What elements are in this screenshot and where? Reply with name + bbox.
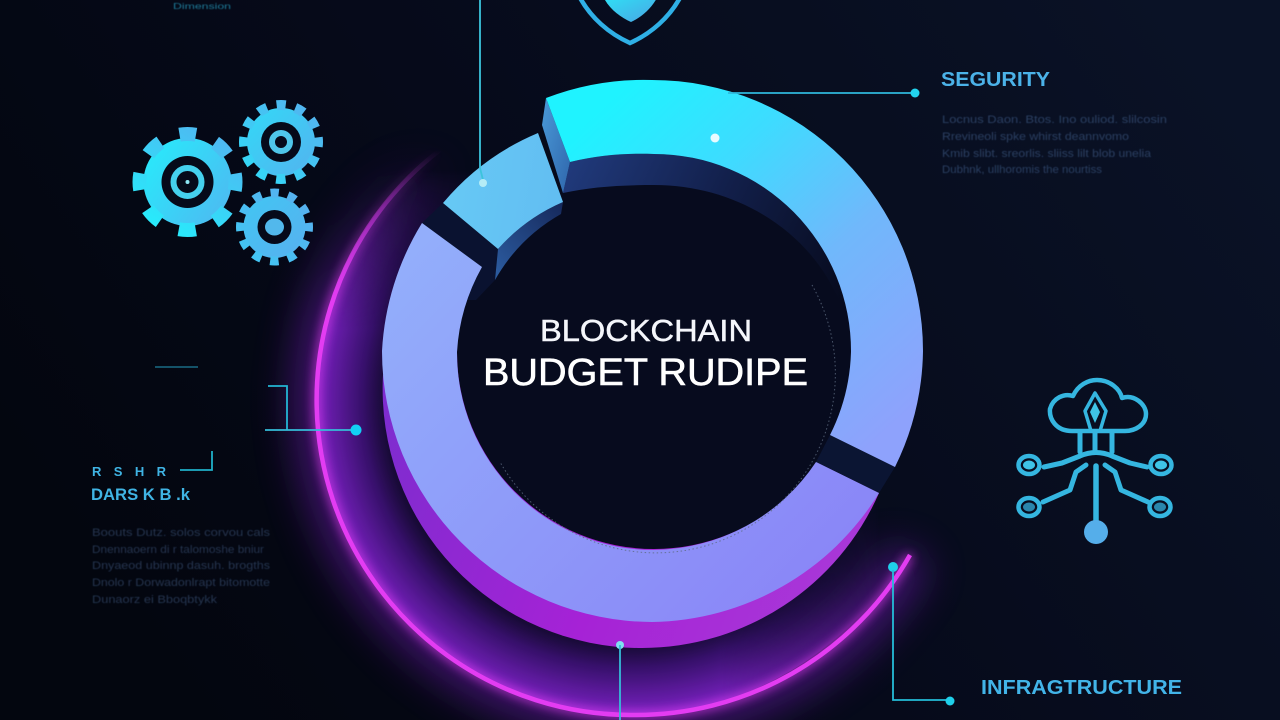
- inner wall of large segment: [563, 154, 851, 352]
- connector: bottom: [616, 641, 624, 720]
- title line 2: BUDGET RUDIPE: [483, 352, 808, 394]
- heading: infrastructure: INFRAGTRUCTURE: [981, 677, 1182, 699]
- text block: left: Dunaorz ei Bboqbtykk: [92, 594, 218, 606]
- text block: left: Dnennaoern di r talomoshe bniur: [92, 544, 264, 556]
- icon: gears: [140, 105, 318, 261]
- circuit nodes: [1018, 456, 1172, 516]
- large gear: [140, 134, 236, 230]
- title line 1: BLOCKCHAIN: [540, 313, 752, 348]
- lower gear: [240, 193, 308, 261]
- gem core: [1090, 402, 1100, 423]
- connector: security: [728, 88, 920, 98]
- title: [483, 313, 808, 394]
- end face of large segment: [542, 98, 570, 193]
- text block: left: Boouts Dutz. solos corvou cals: [92, 527, 271, 539]
- gap between segments, lower right: [816, 435, 895, 493]
- donut extrusion: purple base: [383, 300, 879, 648]
- donut chart: [382, 80, 923, 648]
- dotted inner arc: [500, 285, 835, 553]
- segment: small light blue: [443, 133, 563, 249]
- text block: security: Kmib slibt. sreorlis. sliiss lilt blob unelia: [942, 148, 1152, 160]
- neon ring with purple glow: [315, 85, 945, 715]
- segment: large lavender: [382, 223, 879, 622]
- connector: infrastructure: [888, 562, 954, 706]
- upper gear: [244, 105, 318, 179]
- heading: left block: R S H R: [92, 464, 167, 479]
- heading: security: SEGURITY: [941, 69, 1051, 91]
- text block: security: Locnus Daon. Btos. Ino ouliod. slilcosin: [942, 114, 1167, 126]
- text block: security: Rrevineoli spke whirst deannvomo: [942, 131, 1129, 143]
- heading: left block: [91, 464, 191, 504]
- text block: left: [92, 527, 271, 606]
- icon: shield: [578, 0, 682, 43]
- root node: [1084, 520, 1108, 544]
- gap between segments, upper left: [422, 203, 498, 300]
- text block: security: Dubhnk, ullhoromis the nourtiss: [942, 164, 1103, 176]
- top-left caption fragment: Dimension: [173, 2, 231, 11]
- connector: left block: [155, 367, 362, 470]
- text block: left: Dnolo r Dorwadonlrapt bitomotte: [92, 577, 270, 589]
- heading: left block: DARS K B .k: [91, 485, 191, 504]
- cloud outline: [1050, 380, 1146, 431]
- text block: left: Dnyaeod ubinnp dasuh. brogths: [92, 560, 271, 572]
- circuit traces: [1043, 432, 1148, 532]
- text block: security: [942, 114, 1167, 176]
- donut hole: [457, 155, 851, 549]
- inner wall of small segment: [495, 202, 563, 280]
- cloud gem: [1085, 393, 1106, 431]
- connector: top to small segment: [479, 0, 487, 187]
- segment: security, large cyan: [546, 80, 923, 467]
- icon: cloud network: [1018, 380, 1172, 544]
- marker dot on large segment: [710, 134, 720, 142]
